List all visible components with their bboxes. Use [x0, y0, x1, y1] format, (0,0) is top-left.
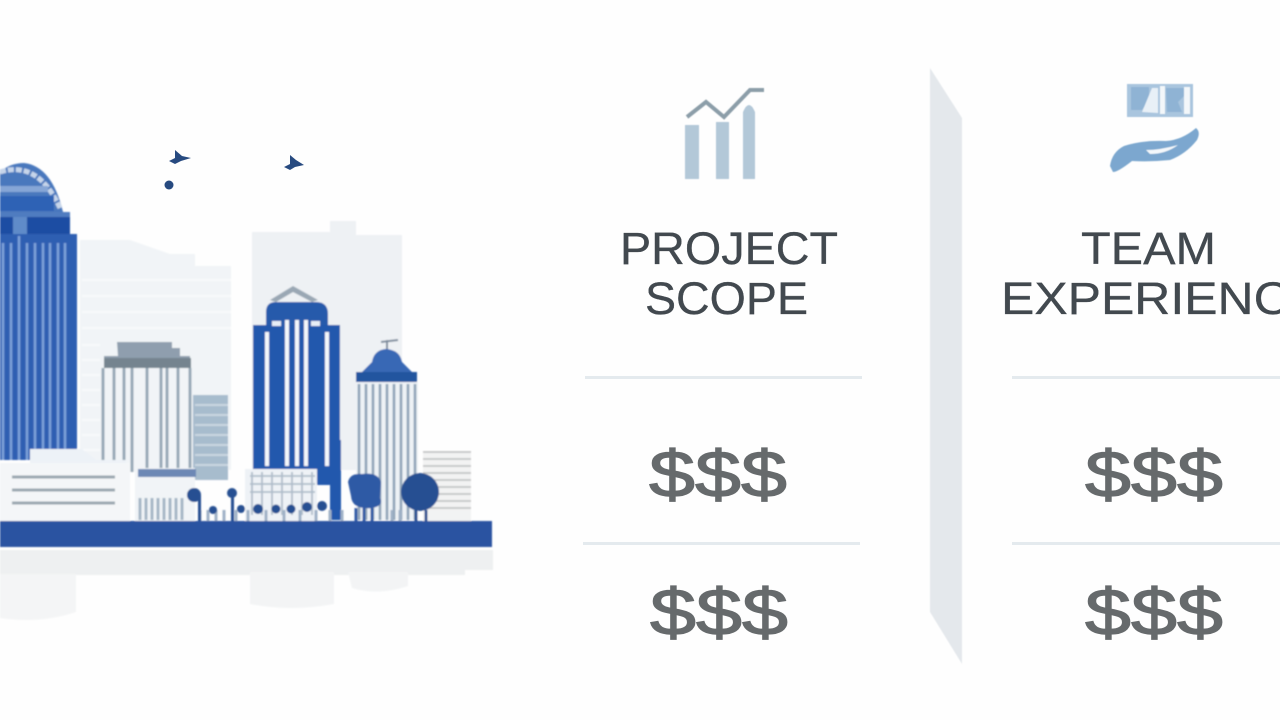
cost rating bottom: $$$	[1085, 575, 1223, 649]
heading: project scope: SCOPE	[645, 273, 808, 324]
divider	[1012, 376, 1280, 379]
panel: project scope	[583, 90, 862, 649]
ground bar	[0, 521, 492, 547]
street trees	[187, 488, 327, 521]
heading: team experience: TEAM	[1081, 223, 1216, 274]
grey striped building	[101, 342, 193, 472]
cost rating bottom: $$$	[650, 575, 788, 649]
divider	[585, 376, 862, 379]
cost rating top: $$$	[649, 437, 787, 511]
left blue tower	[0, 163, 77, 460]
heading: project scope: PROJECT	[620, 223, 838, 274]
icon: birds	[164, 150, 304, 190]
small slate building	[193, 395, 228, 480]
central blue tower	[253, 286, 341, 520]
cost rating top: $$$	[1085, 437, 1223, 511]
divider	[583, 542, 860, 545]
bush tree	[348, 474, 381, 521]
low white buildings	[0, 449, 400, 521]
illustration: city skyline	[0, 163, 493, 620]
panel: team experience	[1001, 84, 1280, 649]
divider	[1012, 542, 1280, 545]
column separator	[930, 68, 962, 664]
heading: team experience	[1001, 223, 1280, 324]
heading: project scope	[620, 223, 838, 324]
icon: hand holding book	[1110, 84, 1199, 172]
grey tower with blue dome	[356, 340, 418, 520]
pale background building right	[252, 221, 402, 470]
icon: bar chart with trend line	[685, 90, 764, 179]
small striped building right	[423, 451, 471, 521]
round tree	[401, 473, 439, 521]
reflection below skyline	[0, 550, 493, 620]
pale background building left	[80, 240, 231, 470]
